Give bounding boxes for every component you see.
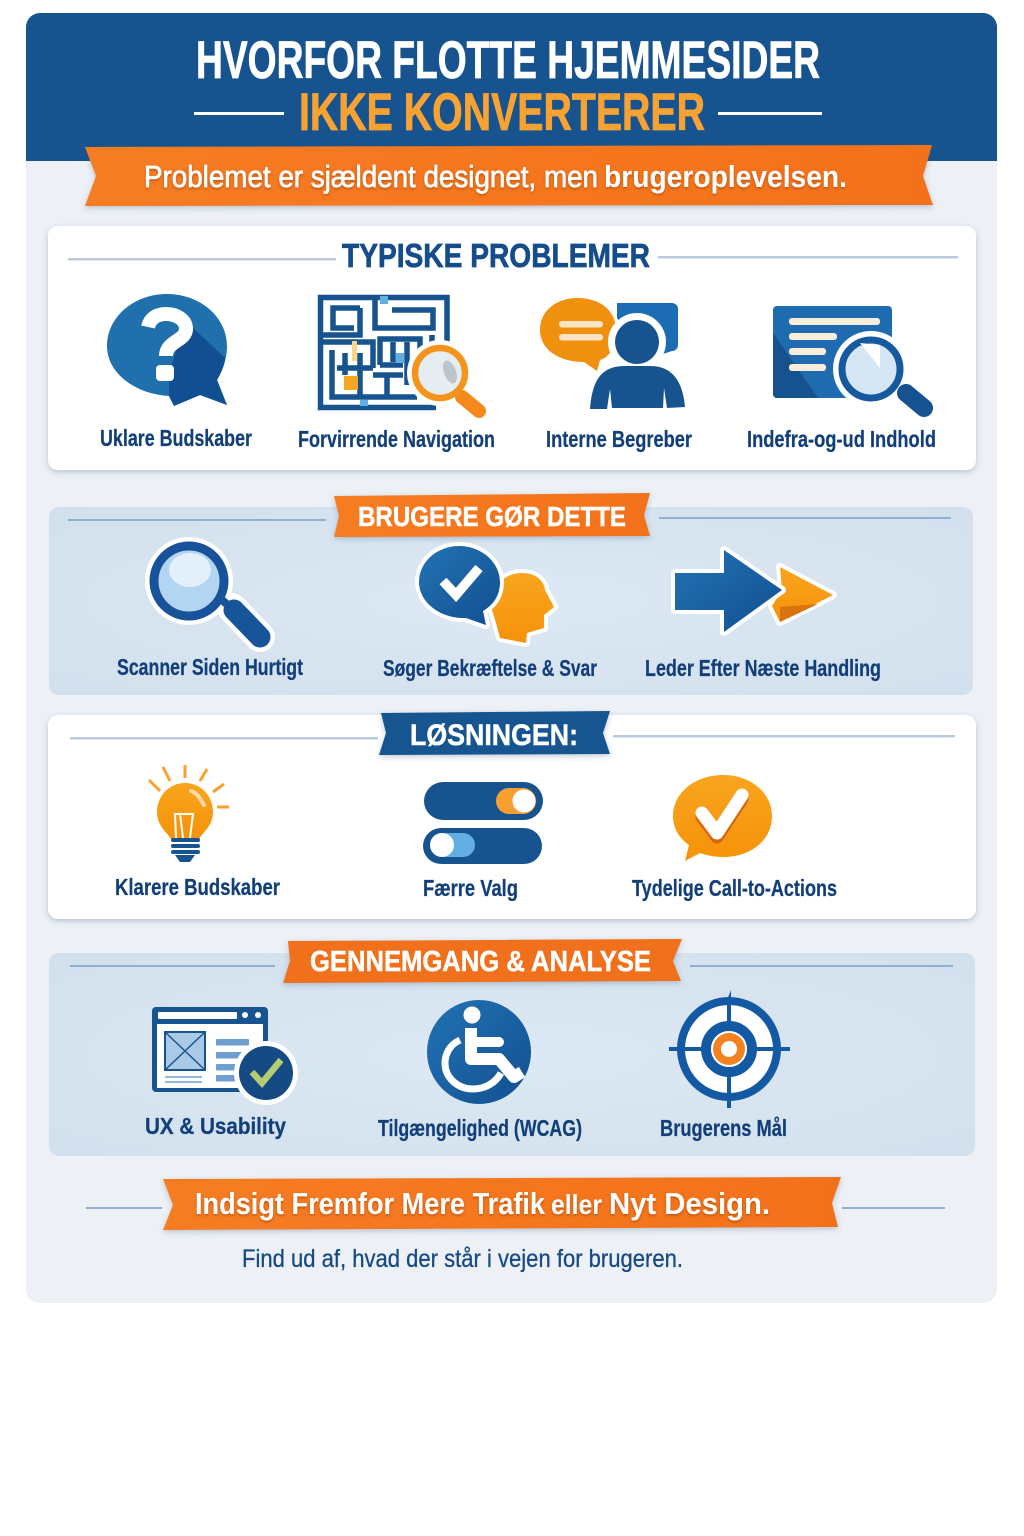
label: Forvirrende Navigation <box>298 426 495 452</box>
closing line: Find ud af, hvad der står i vejen for brugeren. <box>242 1245 683 1273</box>
subtitle text: Problemet er sjældent designet, men <box>144 159 598 194</box>
label: Brugerens Mål <box>660 1115 787 1141</box>
subtitle text: brugeroplevelsen. <box>604 159 847 194</box>
icon: accessibility <box>427 1000 531 1104</box>
icon: magnifier <box>145 537 260 637</box>
icon: speech and person <box>540 298 685 409</box>
icon: browser window with check <box>152 1007 298 1105</box>
label: Klarere Budskaber <box>115 874 280 900</box>
title side rules <box>194 112 822 115</box>
icon: light bulb <box>149 765 229 862</box>
heading text: LØSNINGEN: <box>410 719 578 752</box>
label: Uklare Budskaber <box>100 425 252 451</box>
background panel <box>26 13 997 1303</box>
panel: gennemgang og analyse <box>49 939 975 1156</box>
footer ribbon text: Nyt Design. <box>609 1186 770 1221</box>
label: Tilgængelighed (WCAG) <box>378 1115 582 1141</box>
panel: typiske problemer <box>48 226 976 470</box>
label: Færre Valg <box>423 875 518 901</box>
heading ribbon <box>379 711 610 755</box>
label: Søger Bekræftelse & Svar <box>383 655 597 681</box>
heading ribbon <box>334 493 650 537</box>
heading text: BRUGERE GØR DETTE <box>358 501 626 532</box>
title line 2: IKKE KONVERTERER <box>299 83 705 142</box>
heading ribbon <box>283 939 682 983</box>
label: Scanner Siden Hurtigt <box>117 654 303 680</box>
header <box>26 13 997 161</box>
panel: løsningen <box>48 711 976 919</box>
icon: content with magnifier <box>773 306 924 408</box>
footer ribbon text: Indsigt Fremfor Mere Trafik <box>195 1186 546 1221</box>
label: Indefra-og-ud Indhold <box>747 426 936 452</box>
label: Interne Begreber <box>546 426 692 452</box>
footer ribbon <box>86 1177 945 1230</box>
icon: target <box>669 990 790 1108</box>
footer ribbon text: eller <box>551 1189 602 1220</box>
icon: toggle switches <box>423 782 543 864</box>
icon: check bubble and head <box>419 546 554 643</box>
label: Leder Efter Næste Handling <box>645 655 881 681</box>
subtitle ribbon <box>85 145 933 206</box>
heading text: GENNEMGANG & ANALYSE <box>310 946 651 978</box>
icon: question bubble <box>107 294 227 406</box>
icon: double arrow <box>675 550 833 632</box>
icon: maze with magnifier <box>320 296 479 411</box>
label: UX & Usability <box>145 1113 286 1139</box>
icon: orange check bubble <box>673 775 772 861</box>
panel: brugere gør dette <box>49 493 973 695</box>
label: Tydelige Call-to-Actions <box>632 875 837 901</box>
heading: typiske problemer: TYPISKE PROBLEMER <box>342 237 650 274</box>
